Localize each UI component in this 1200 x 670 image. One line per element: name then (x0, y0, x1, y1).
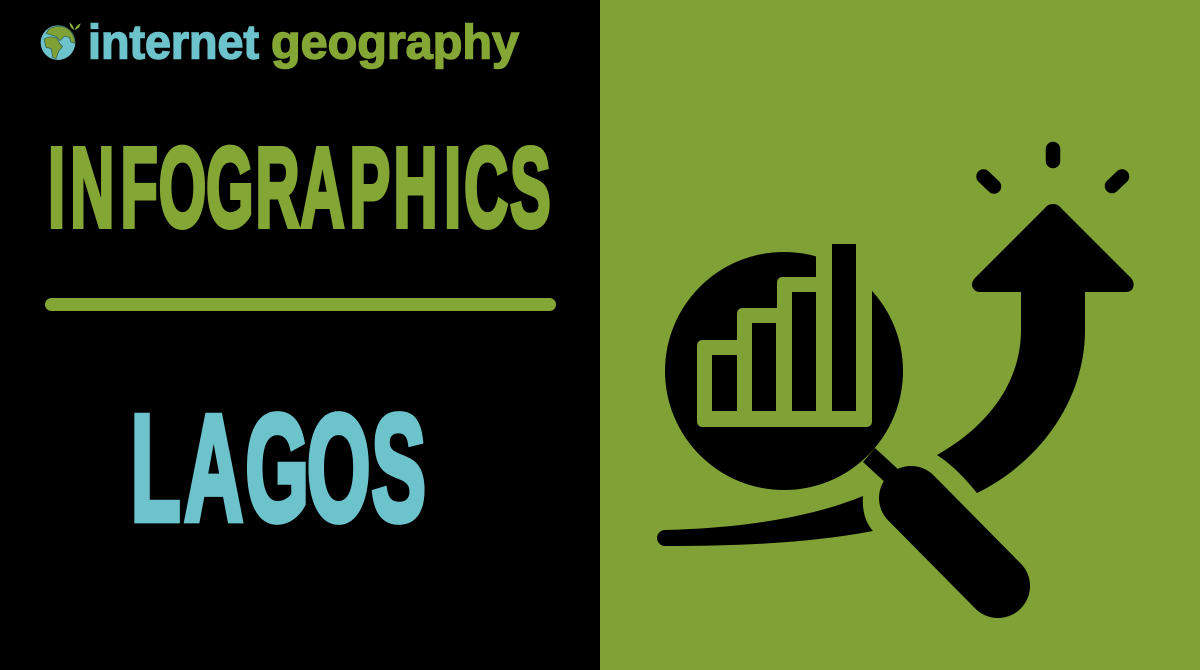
logo text: internet: internet (88, 17, 259, 70)
icon: globe with leaf (41, 23, 81, 60)
baseline swoosh (657, 496, 873, 546)
bar 1 (712, 355, 737, 411)
spark lines (984, 149, 1122, 186)
spark: top (1046, 149, 1060, 161)
bar 4 (832, 244, 856, 411)
bar chart (712, 244, 856, 411)
panel: black left panel (0, 0, 600, 670)
icon: magnifying glass over rising chart with arrow (657, 149, 1134, 586)
divider line (45, 298, 556, 311)
panel: green right panel (600, 0, 1200, 670)
spark: right (1112, 176, 1122, 186)
magnifying glass lens (665, 252, 903, 490)
bar 2 (752, 323, 776, 411)
rising arrow (937, 204, 1134, 493)
logo text: geography: geography (271, 17, 519, 70)
chart frame cut-out (697, 235, 872, 427)
heading: INFOGRAPHICS: INFOGRAPHICS (48, 126, 551, 251)
magnifying glass neck (863, 448, 900, 485)
spark: left (984, 176, 994, 186)
bar 3 (792, 292, 816, 411)
magnifying glass handle (911, 498, 998, 586)
logo: internet geography (41, 17, 519, 70)
heading: LAGOS: LAGOS (131, 383, 426, 552)
